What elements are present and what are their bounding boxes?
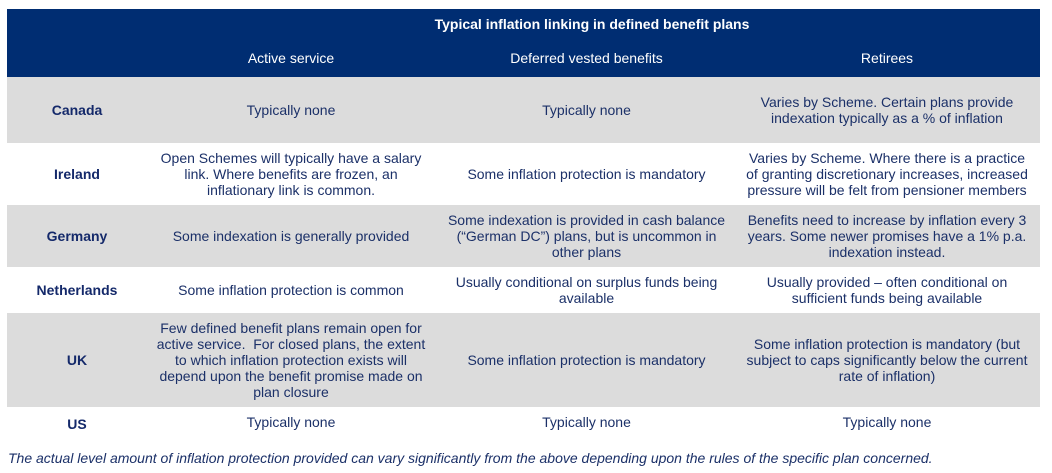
Ireland active service: link. Where benefits are frozen, an — [184, 166, 398, 182]
Germany retirees: Benefits need to increase by inflation every 3 — [748, 212, 1026, 228]
Germany label: Germany — [47, 228, 107, 244]
Canada active service: Typically none — [247, 102, 335, 118]
Ireland active service — [161, 150, 422, 198]
Canada label: Canada — [52, 102, 102, 118]
column heading: deferred vested benefits: Deferred vested benefits — [510, 50, 663, 66]
Canada deferred: Typically none — [542, 102, 631, 118]
US retirees: Typically none — [843, 414, 931, 430]
Netherlands label: Netherlands — [37, 282, 117, 298]
US deferred: Typically none — [542, 414, 631, 430]
Germany deferred — [448, 212, 725, 260]
UK active service: depend upon the benefit promise made on — [159, 368, 423, 384]
Netherlands retirees: Usually provided – often conditional on — [767, 274, 1007, 290]
UK retirees: Some inflation protection is mandatory (but — [754, 336, 1020, 352]
Netherlands deferred: Usually conditional on surplus funds being — [456, 274, 717, 290]
table title: Typical inflation linking in defined benefit plans — [435, 16, 749, 32]
UK retirees: subject to caps significantly below the current — [747, 352, 1027, 368]
Germany deferred: other plans — [552, 244, 621, 260]
Canada retirees: indexation typically as a % of inflation — [771, 110, 1003, 126]
Ireland active service: inflationary link is common. — [207, 182, 375, 198]
footnote: The actual level amount of inflation protection provided can vary significantly from the above depending upon the rules of the specific plan concerned. — [8, 450, 933, 466]
Ireland retirees: of granting discretionary increases, increased — [746, 166, 1028, 182]
US active service: Typically none — [247, 414, 335, 430]
Ireland retirees — [746, 150, 1028, 198]
UK label: UK — [67, 352, 87, 368]
Germany retirees — [748, 212, 1026, 260]
Ireland active service: Open Schemes will typically have a salary — [161, 150, 421, 166]
Netherlands retirees: sufficient funds being available — [792, 290, 982, 306]
US label: US — [67, 416, 87, 432]
Germany deferred: (“German DC”) plans, but is uncommon in — [457, 228, 716, 244]
Canada retirees — [760, 94, 1013, 126]
Germany deferred: Some indexation is provided in cash balance — [448, 212, 725, 228]
UK active service: active service. For closed plans, the extent — [157, 336, 425, 352]
UK retirees — [746, 336, 1028, 384]
column heading: active service: Active service — [248, 50, 334, 66]
Germany retirees: indexation instead. — [829, 244, 945, 260]
Ireland retirees: pressure will be felt from pensioner members — [747, 182, 1027, 198]
UK active service — [157, 320, 426, 400]
column heading: retirees: Retirees — [861, 50, 913, 66]
Germany retirees: years. Some newer promises have a 1% p.a. — [748, 228, 1026, 244]
row: UK — [7, 313, 1040, 407]
Canada retirees: Varies by Scheme. Certain plans provide — [761, 94, 1013, 110]
UK deferred: Some inflation protection is mandatory — [467, 352, 706, 368]
row: Germany — [7, 205, 1040, 267]
Netherlands active service: Some inflation protection is common — [178, 282, 404, 298]
Germany active service: Some indexation is generally provided — [173, 228, 409, 244]
table header band — [7, 9, 1040, 77]
Netherlands retirees — [767, 274, 1007, 306]
UK active service: Few defined benefit plans remain open for — [160, 320, 422, 336]
Ireland deferred: Some inflation protection is mandatory — [467, 166, 706, 182]
Ireland label: Ireland — [54, 166, 100, 182]
UK active service: to which inflation protection exists will — [175, 352, 407, 368]
Ireland retirees: Varies by Scheme. Where there is a practice — [749, 150, 1025, 166]
UK active service: plan closure — [253, 384, 329, 400]
Netherlands deferred — [456, 274, 717, 306]
UK retirees: rate of inflation) — [839, 368, 935, 384]
Netherlands deferred: available — [559, 290, 614, 306]
row: Canada — [7, 77, 1040, 143]
